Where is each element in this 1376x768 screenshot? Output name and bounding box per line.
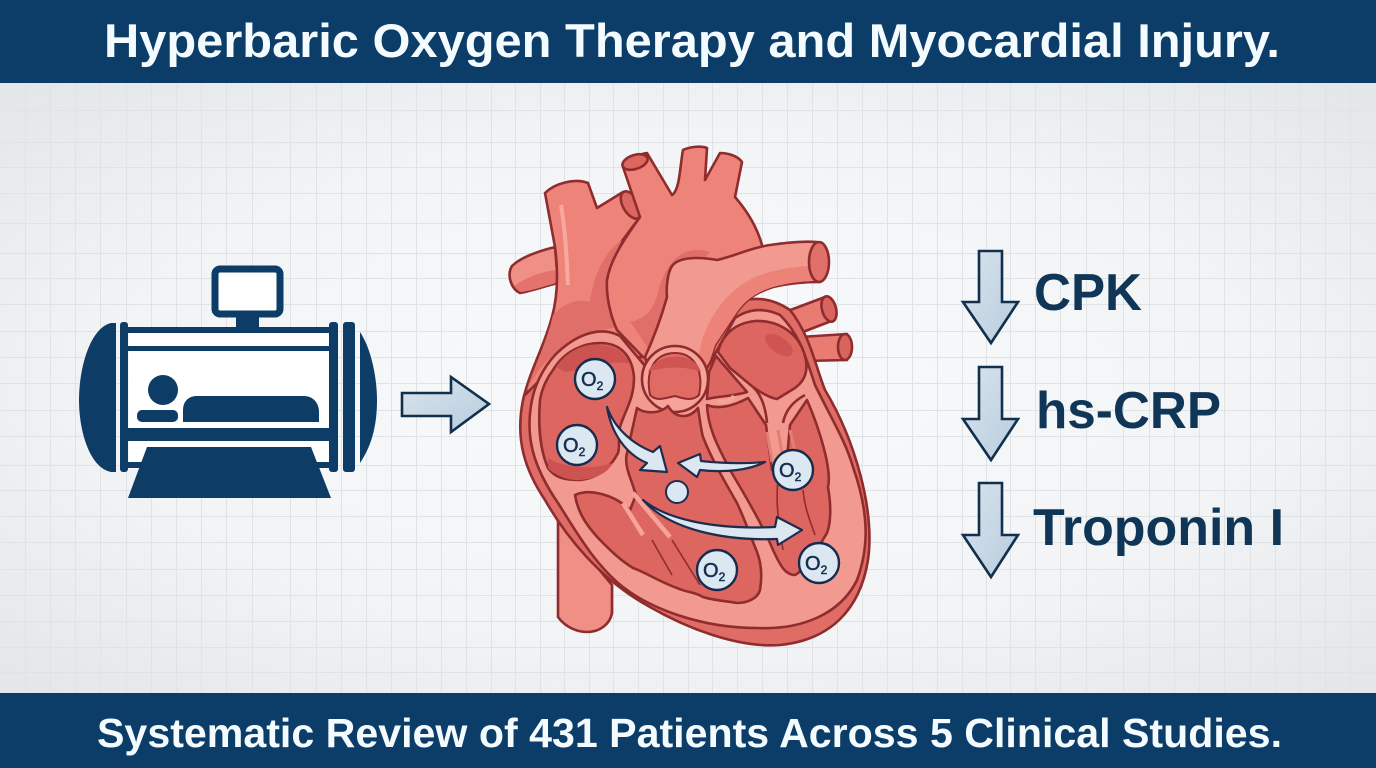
oxygen bubble, small [666, 481, 688, 503]
arrow: oxygen flow upper left [607, 407, 667, 472]
superior vena cava [525, 181, 643, 395]
illustration: heart cross-section [510, 147, 869, 645]
mitral funnel curves [753, 387, 805, 423]
right atrium chamber [539, 343, 634, 480]
icon: hyperbaric chamber with patient [79, 269, 377, 498]
pulmonary artery, left [510, 247, 558, 293]
arrow: down [963, 367, 1018, 460]
arrow: down [963, 483, 1018, 577]
pulmonary veins, right [785, 297, 834, 335]
biomarker: hs-CRP decreased: hs-CRP [1036, 382, 1221, 440]
arrow: down [963, 251, 1018, 343]
title: Hyperbaric Oxygen Therapy and Myocardial Injury. [104, 14, 1280, 67]
O2 badge: O [563, 435, 579, 457]
arrow: oxygen flow lower [643, 500, 802, 545]
O2 badge [575, 359, 615, 399]
left atrium chamber [718, 321, 806, 399]
right chamber muscle [707, 398, 830, 575]
O2 badge: O [703, 560, 719, 582]
oxygen molecule badges [557, 359, 839, 590]
O2 badge: 2 [795, 470, 802, 484]
ventricle diagonal chamber [575, 406, 761, 603]
O2 badge [773, 450, 813, 490]
biomarker: CPK decreased: CPK [1034, 264, 1142, 322]
O2 badge: O [779, 460, 795, 482]
O2 badge: 2 [597, 379, 604, 393]
biomarker: Troponin I decreased [963, 483, 1284, 577]
biomarker: Troponin I decreased: Troponin I [1033, 499, 1284, 557]
title banner [0, 0, 1376, 83]
myocardium inner layer [529, 310, 866, 628]
aorta [607, 147, 762, 360]
O2 badge: 2 [579, 445, 586, 459]
subtitle: Systematic Review of 431 Patients Across 5 Clinical Studies. [97, 710, 1282, 756]
O2 badge: O [805, 553, 821, 575]
heart body outer wall [520, 299, 869, 645]
biomarker: hs-CRP decreased [963, 367, 1221, 460]
dark chamber beside valve [707, 356, 747, 399]
O2 badge: 2 [821, 563, 828, 577]
O2 badge: O [581, 369, 597, 391]
biomarker: CPK decreased [963, 251, 1142, 343]
aortic valve ring [642, 346, 708, 412]
right atrium shading [556, 345, 630, 372]
O2 badge [799, 543, 839, 583]
O2 badge [697, 550, 737, 590]
chordae and valve details [767, 430, 795, 462]
arrow: oxygen flow from right [678, 454, 765, 477]
pulmonary trunk [645, 242, 820, 372]
arrow: chamber to heart [402, 377, 489, 432]
footer banner [0, 693, 1376, 768]
vena cava, inferior [558, 520, 612, 632]
O2 badge [557, 425, 597, 465]
O2 badge: 2 [719, 570, 726, 584]
